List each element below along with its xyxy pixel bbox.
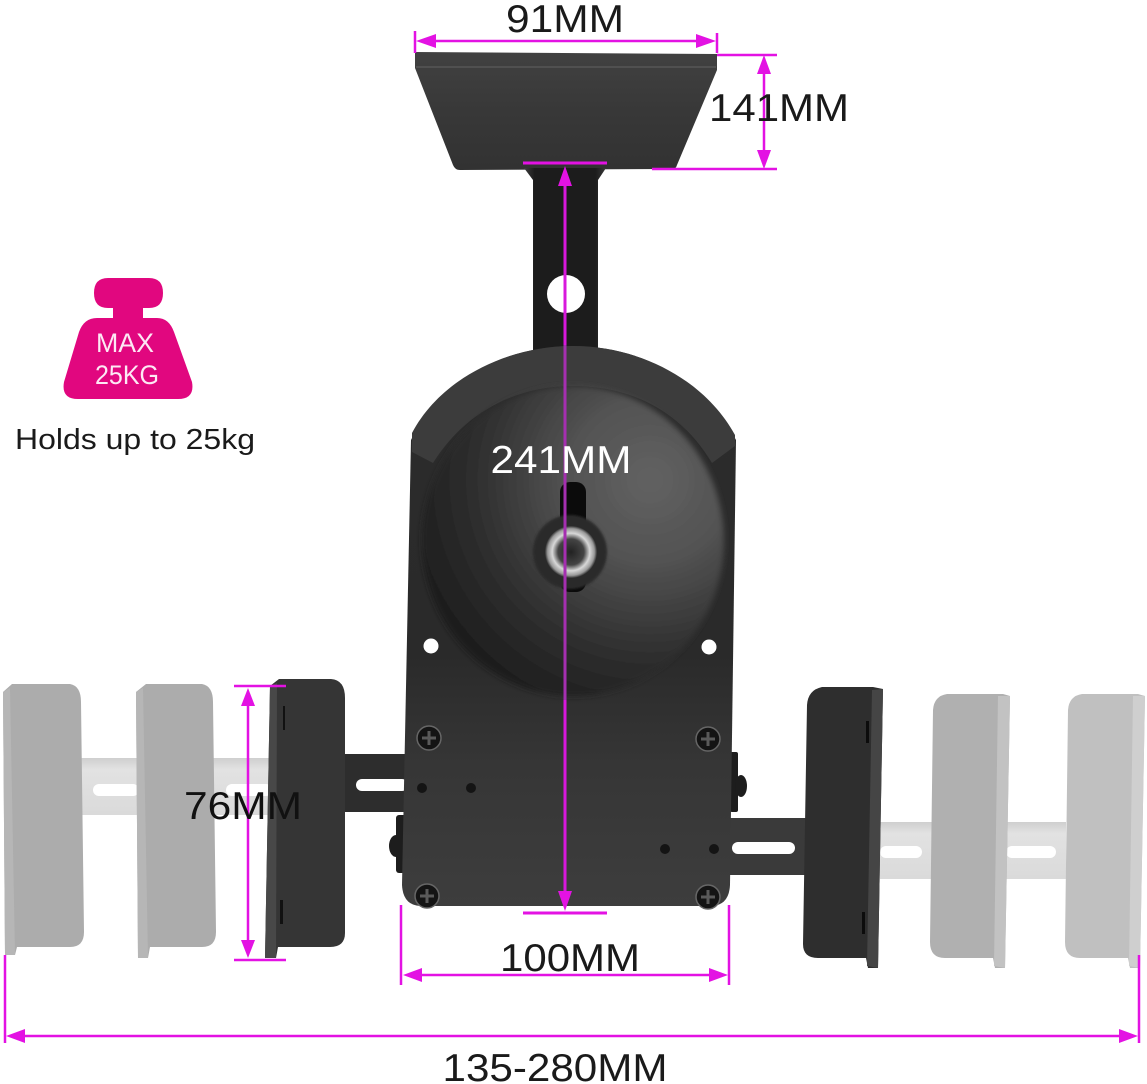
icon: max weight: 25KG	[95, 360, 159, 390]
side bolts	[389, 752, 747, 873]
main mount	[389, 52, 747, 909]
dimension: 141MM: 141MM	[709, 87, 849, 130]
dimension: 100MM: 100MM	[500, 937, 640, 980]
ghost bracket: middle right	[930, 694, 1010, 968]
dimension: 76MM	[184, 686, 302, 960]
dark arm: left	[342, 754, 408, 812]
dimension: 241MM: 241MM	[490, 439, 632, 482]
icon: max weight: MAX	[96, 328, 154, 358]
wall plate	[402, 346, 736, 906]
mounting holes	[417, 638, 719, 854]
dimension: 135-280MM	[5, 955, 1139, 1084]
ghost positions: right arm	[880, 822, 1066, 879]
dark bracket: right	[803, 687, 883, 968]
dimension: 76MM: 76MM	[184, 785, 302, 828]
centre bolt	[533, 515, 607, 589]
speaker top plate	[415, 52, 717, 170]
dark bracket: left	[265, 679, 345, 958]
dimension: 91MM	[415, 0, 717, 53]
dimension: 241MM	[490, 163, 632, 913]
ghost positions: left arm	[80, 758, 272, 815]
screws	[415, 726, 720, 909]
icon: max weight	[64, 278, 192, 399]
support neck	[524, 168, 606, 352]
dimension: 141MM	[652, 55, 849, 169]
dimension: 100MM	[401, 905, 729, 985]
centre slot	[560, 482, 586, 592]
textured shoulder	[412, 346, 735, 463]
ghost bracket: far right	[1065, 694, 1145, 968]
ghost bracket: second left	[136, 684, 216, 958]
ghost bracket: far left	[3, 684, 84, 955]
dome	[422, 386, 724, 696]
weight caption: Holds up to 25kg	[15, 424, 255, 456]
dark arm: right	[730, 818, 806, 875]
